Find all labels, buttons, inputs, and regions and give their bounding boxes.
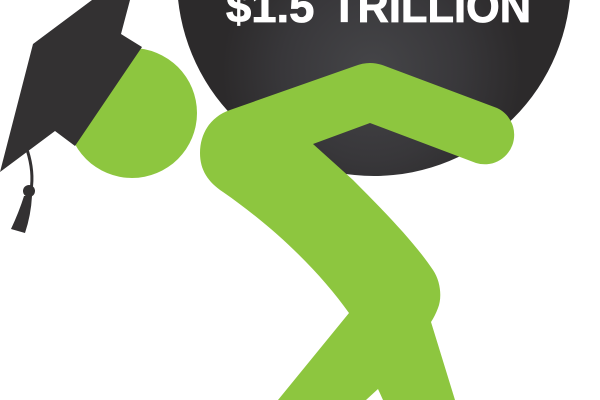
cap board — [0, 0, 142, 172]
tassel — [11, 196, 32, 233]
debt ball — [177, 0, 571, 176]
figure: body, arms and legs — [200, 63, 514, 400]
tassel cord — [28, 151, 32, 190]
graduation cap — [0, 0, 142, 233]
tassel knob — [23, 185, 35, 197]
ball label: $1.5 trillion — [226, 0, 531, 32]
figure: head — [67, 48, 197, 178]
